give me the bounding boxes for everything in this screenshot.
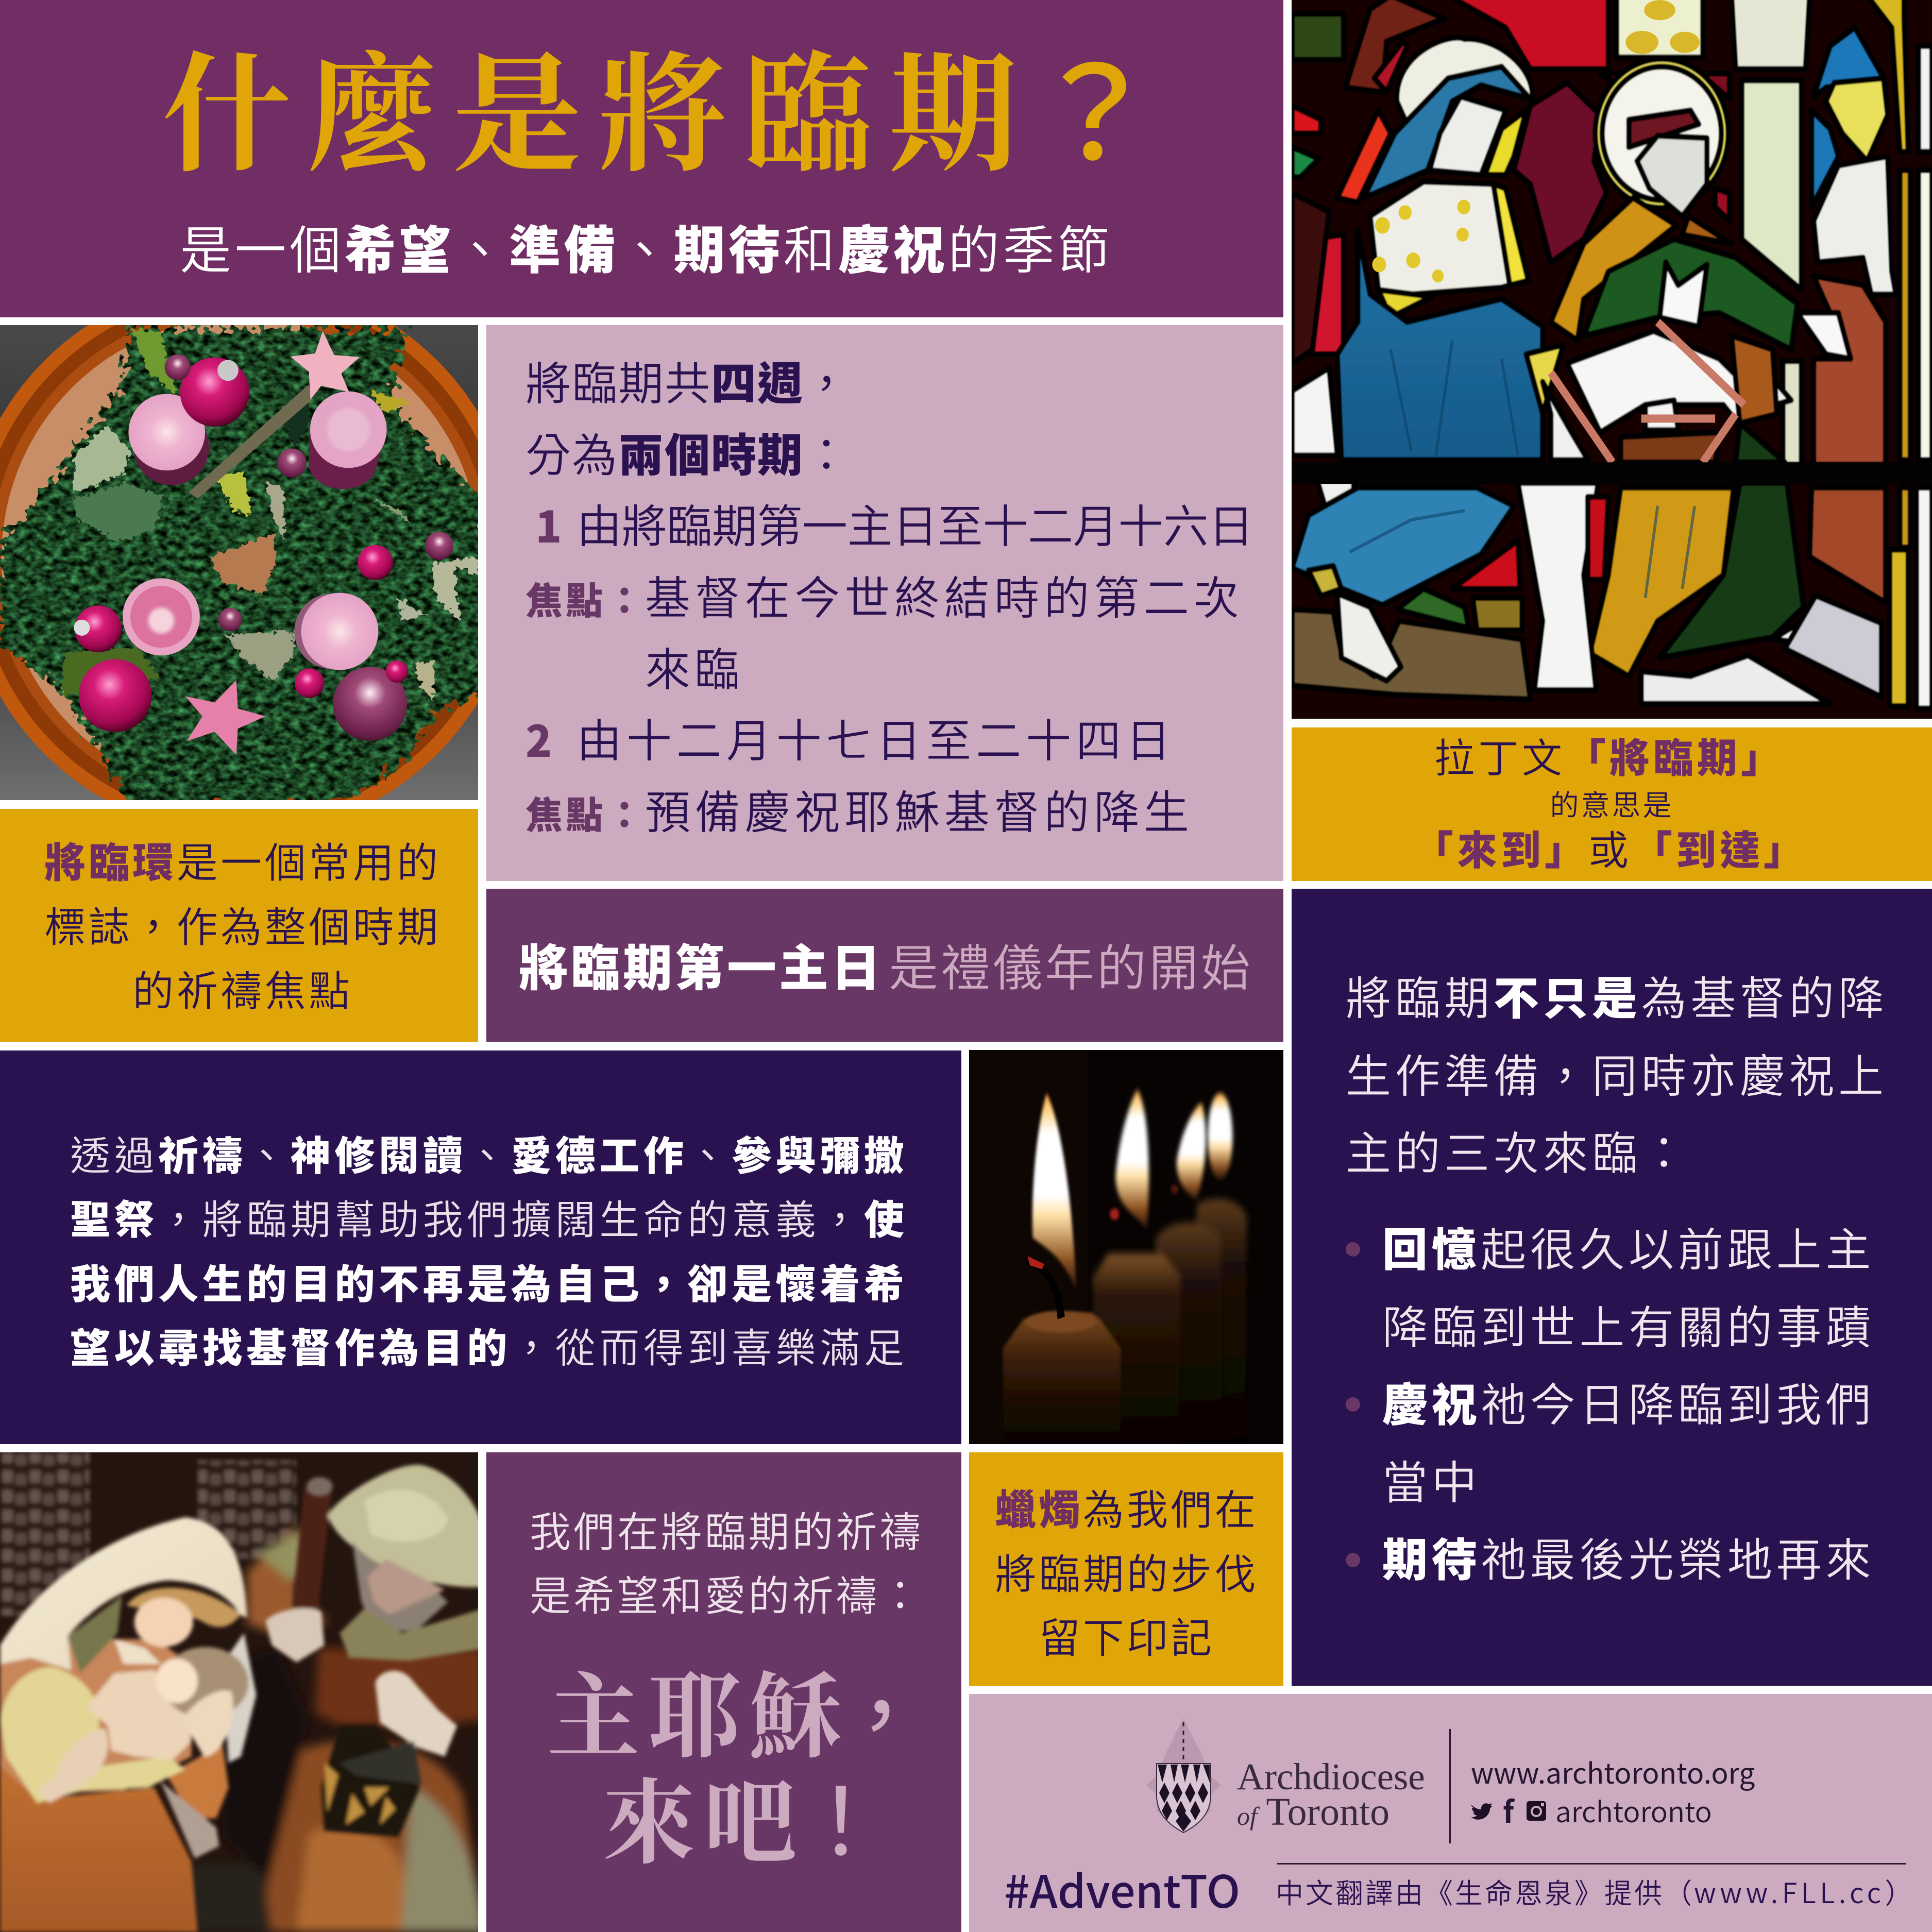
prayer call: Come Lord Jesus: 來吧！ bbox=[603, 1748, 895, 1882]
list: three comings: 當中 bbox=[1382, 1447, 1481, 1512]
text: candle caption bbox=[969, 1475, 1284, 1667]
stars bbox=[185, 331, 360, 755]
text: candle caption: 將臨期的步伐 bbox=[995, 1541, 1259, 1601]
text: prayer intro bbox=[530, 1497, 923, 1626]
baubles bbox=[74, 354, 453, 741]
panel: candle caption bbox=[969, 1452, 1283, 1686]
list: three comings: 慶祝祂今日降臨到我們 bbox=[1382, 1369, 1875, 1434]
candles bbox=[123, 392, 387, 670]
panel: Latin meaning caption bbox=[1292, 727, 1932, 881]
bullet dot bbox=[1346, 1397, 1360, 1412]
text: practices paragraph: 聖祭，將臨期幫助我們擴闊生命的意義，使 bbox=[70, 1188, 908, 1246]
text: candle caption: 留下印記 bbox=[1039, 1605, 1214, 1665]
translation credit: 中文翻譯由《生命恩泉》提供（www.FLL.cc） bbox=[1276, 1871, 1914, 1911]
text: Latin meaning: 的意思是 bbox=[1550, 783, 1673, 824]
hashtag: #AdventTO bbox=[1004, 1856, 1240, 1921]
logo: archdiocese crest bbox=[1144, 1718, 1224, 1833]
text: first Sunday statement: 將臨期第一主日是禮儀年的開始 bbox=[519, 928, 1253, 1000]
panel: three comings of the Lord bbox=[1292, 889, 1932, 1686]
text block: four weeks and two periods: 由十二月十七日至二十四日 bbox=[577, 705, 1176, 770]
text: wreath caption: 的祈禱焦點 bbox=[132, 958, 353, 1018]
text: practices paragraph: 望以尋找基督作為目的，從而得到喜樂滿足 bbox=[70, 1316, 908, 1374]
text: Latin meaning: 拉丁文「將臨期」 bbox=[1434, 727, 1785, 784]
image: stained glass bbox=[1292, 0, 1932, 719]
prayer call: Come Lord Jesus bbox=[486, 1452, 961, 1932]
list: three comings: 期待祂最後光榮地再來 bbox=[1382, 1524, 1875, 1589]
text: wreath caption: 將臨環是一個常用的 bbox=[44, 830, 441, 890]
text block: four weeks and two periods: 將臨期共四週， bbox=[526, 348, 850, 413]
text: wreath caption: 標誌，作為整個時期 bbox=[44, 894, 441, 954]
text: wreath caption bbox=[44, 830, 441, 1018]
text: three comings intro: 將臨期不只是為基督的降 bbox=[1346, 962, 1888, 1028]
title: 什麼是將臨期？ bbox=[162, 10, 1175, 197]
list: three comings bbox=[1382, 1208, 1913, 1596]
panel: title header bbox=[0, 0, 1283, 317]
text: prayer intro: 是希望和愛的祈禱： bbox=[530, 1563, 923, 1623]
logo text: Archdiocese of Toronto: Archdiocese bbox=[1237, 1756, 1425, 1798]
icon: facebook: f bbox=[1503, 1788, 1514, 1832]
prayer call: Come Lord Jesus: 主耶穌， bbox=[547, 1641, 936, 1776]
divider: horizontal bbox=[1277, 1863, 1906, 1865]
logo text: Archdiocese of Toronto bbox=[1237, 1751, 1433, 1841]
list: three comings: 回憶起很久以前跟上主 bbox=[1382, 1214, 1875, 1279]
text block: four weeks and two periods: 來臨 bbox=[645, 634, 743, 699]
text: Latin meaning: 「來到」或「到達」 bbox=[1413, 819, 1807, 876]
text: three comings intro: 生作準備，同時亦慶祝上 bbox=[1346, 1040, 1888, 1106]
panel: prayer of hope bbox=[486, 1452, 961, 1932]
text block: four weeks and two periods: 基督在今世終結時的第二次 bbox=[645, 562, 1244, 628]
text: practices paragraph: 我們人生的目的不再是為自己，卻是懷着希 bbox=[70, 1252, 908, 1310]
text block: four weeks and two periods: 預備慶祝耶穌基督的降生 bbox=[645, 776, 1194, 842]
text: three comings intro bbox=[1346, 962, 1888, 1183]
divider: vertical bbox=[1449, 1729, 1451, 1843]
panel: prayer and spiritual practices bbox=[0, 1050, 961, 1444]
panel: first Sunday of Advent bbox=[486, 889, 1283, 1042]
text block: four weeks and two periods: 2 bbox=[526, 707, 552, 770]
bullet dot bbox=[1346, 1242, 1360, 1257]
panel: advent wreath caption bbox=[0, 809, 478, 1042]
icon: twitter bbox=[1471, 1802, 1493, 1820]
text: Latin meaning bbox=[1413, 727, 1807, 876]
text: prayer intro: 我們在將臨期的祈禱 bbox=[530, 1499, 923, 1559]
text: candle caption: 蠟燭為我們在 bbox=[995, 1477, 1259, 1537]
bullet dot bbox=[1346, 1553, 1360, 1567]
panel: two periods explanation bbox=[486, 325, 1283, 881]
image: nativity figurines bbox=[0, 1452, 478, 1932]
text: practices paragraph bbox=[70, 1121, 915, 1378]
subtitle: 是一個希望、準備、期待和慶祝的季節 bbox=[180, 209, 1113, 283]
social icons and handle bbox=[1471, 1791, 1713, 1828]
text block: four weeks and two periods: 焦點： bbox=[526, 571, 646, 625]
text block: four weeks and two periods bbox=[526, 348, 1253, 842]
icon: instagram bbox=[1527, 1801, 1546, 1821]
text block: four weeks and two periods: 焦點： bbox=[526, 785, 646, 839]
text: practices paragraph: 透過祈禱、神修閱讀、愛德工作、參與彌撒 bbox=[70, 1124, 908, 1182]
text block: four weeks and two periods: 分為兩個時期： bbox=[526, 419, 850, 485]
image: burning candles bbox=[969, 1050, 1283, 1444]
website: www.archtoronto.org bbox=[1471, 1751, 1755, 1792]
social icons and handle: archtoronto bbox=[1555, 1789, 1712, 1831]
logo text: Archdiocese of Toronto: of Toronto bbox=[1237, 1790, 1389, 1834]
text: three comings intro: 主的三次來臨： bbox=[1346, 1117, 1690, 1183]
image: advent wreath bbox=[0, 325, 478, 800]
panel: footer credits bbox=[969, 1694, 1932, 1932]
text block: four weeks and two periods: 由將臨期第一主日至十二月十六日 bbox=[577, 490, 1253, 556]
text block: four weeks and two periods: 1 bbox=[535, 493, 562, 555]
list: three comings: 降臨到世上有關的事蹟 bbox=[1382, 1291, 1875, 1357]
